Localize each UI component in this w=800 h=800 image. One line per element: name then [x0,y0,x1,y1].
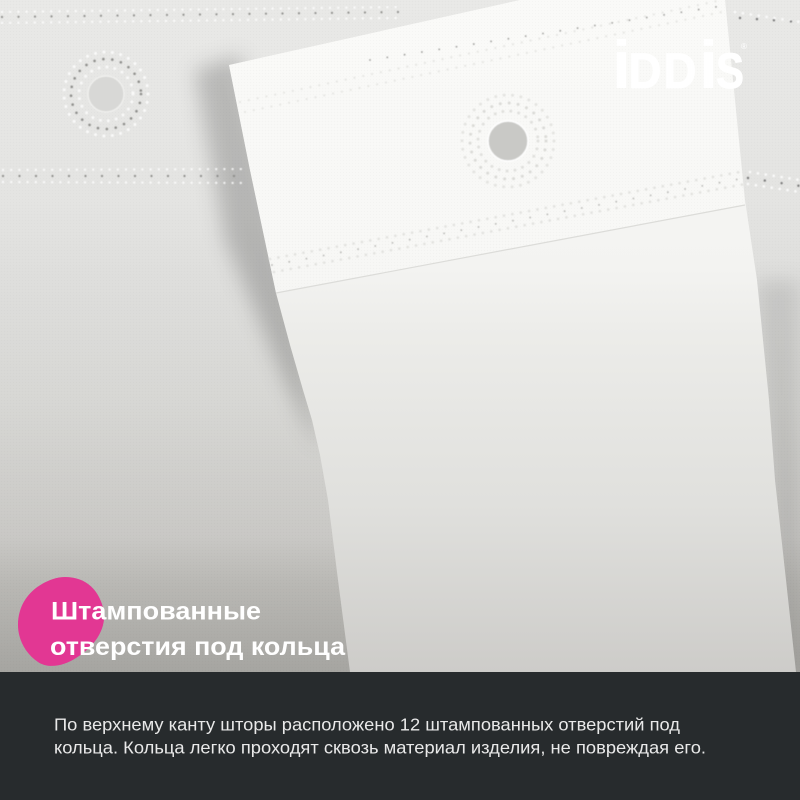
logo: IDDIS: ® [741,42,747,51]
logo: IDDIS: i [612,27,631,103]
logo: IDDIS: D [664,43,696,99]
logo: IDDIS: D [628,43,662,99]
body text [54,714,706,758]
logo: IDDIS: i [699,27,718,103]
flap top perforated band [240,0,722,112]
back curtain lower perforated band [3,169,800,192]
body text: кольца. Кольца легко проходят сквозь материал изделия, не повреждая его. [54,738,706,758]
flap lower perforated band [270,171,745,272]
flap stamped hole with rosette [462,95,554,187]
flap seam line [276,205,745,293]
heading: отверстия под кольца [50,633,346,661]
back curtain stamped hole with rosette [64,52,148,136]
pink accent blob [18,577,104,666]
back curtain top perforated band [2,7,800,23]
dark footer panel [0,672,800,800]
logo: IDDIS [612,27,747,103]
heading [50,598,346,661]
logo: IDDIS: S [716,43,744,99]
front curtain flap [229,0,796,672]
heading: Штампованные [51,598,261,626]
body text: По верхнему канту шторы расположено 12 штампованных отверстий под [54,714,680,734]
